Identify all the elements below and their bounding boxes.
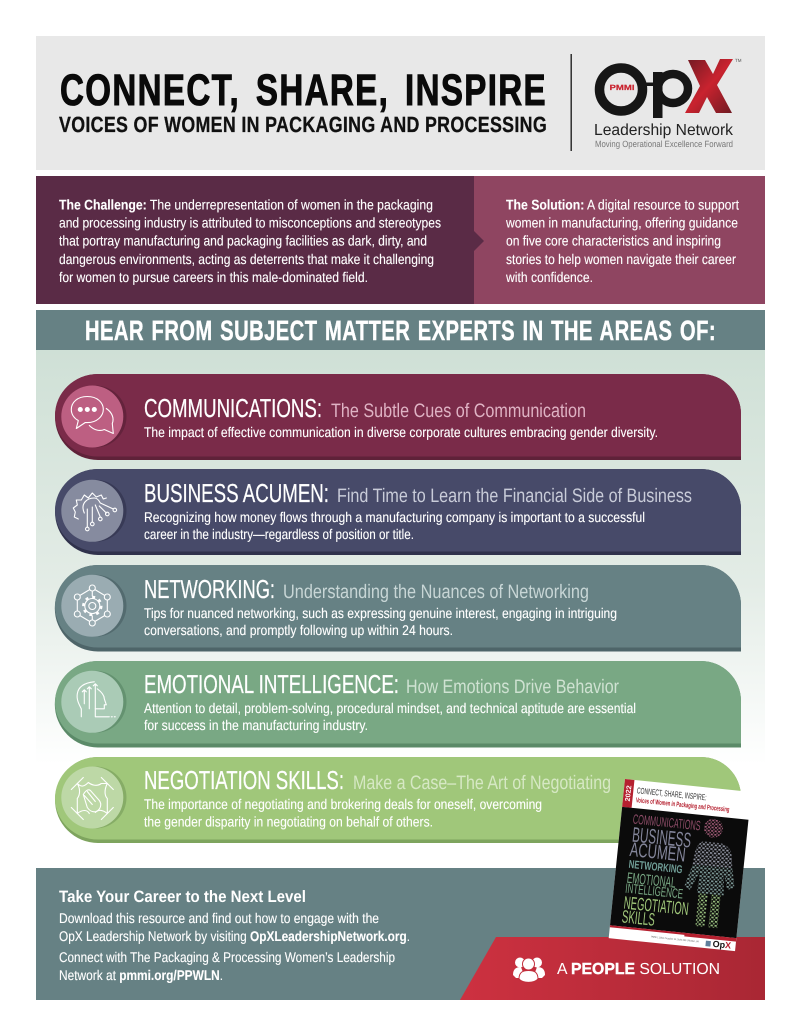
icon: network gear	[74, 585, 110, 626]
cover word list	[621, 811, 701, 933]
cover word list: COMMUNICATIONS	[632, 812, 701, 833]
banner: a people solution	[460, 937, 765, 1000]
panel: the solution	[474, 176, 765, 304]
cover word list: EMOTIONAL	[626, 870, 677, 892]
heading: NETWORKING:	[144, 574, 275, 604]
description: career in the industry—regardless of position or title.	[144, 526, 414, 542]
description: Recognizing how money flows through a manufacturing company is important to a successful	[144, 509, 645, 525]
heading: COMMUNICATIONS:	[144, 393, 322, 423]
OpX Leadership Network logo: Moving Operational Excellence Forward	[595, 139, 733, 149]
description: The impact of effective communication in diverse corporate cultures embracing gender diversity.	[144, 424, 658, 440]
footer text: OpX Leadership Network by visiting OpXLeadershipNetwork.org.	[59, 928, 410, 944]
cover word list: SKILLS	[621, 906, 656, 930]
solution text	[505, 196, 739, 285]
solution text: stories to help women navigate their career	[506, 251, 736, 267]
footer panel	[36, 868, 765, 1000]
background panel	[36, 350, 765, 868]
header panel	[36, 36, 765, 170]
cover word list: ACUMEN	[629, 839, 687, 867]
challenge text: that portray manufacturing and packaging facilities as dark, dirty, and	[59, 233, 427, 249]
OpX Leadership Network logo: Leadership Network	[594, 122, 734, 139]
publication cover	[609, 779, 751, 951]
solution text: on five core characteristics and inspiring	[506, 233, 721, 249]
description: Attention to detail, problem-solving, procedural mindset, and technical aptitude are essential	[144, 700, 636, 716]
description	[144, 700, 636, 733]
description: for success in the manufacturing industry.	[144, 717, 368, 733]
footer text: Connect with The Packaging & Processing Women’s Leadership	[59, 949, 395, 965]
challenge text: The Challenge: The underrepresentation of women in the packaging	[59, 196, 433, 212]
subheading: Make a Case–The Art of Negotiating	[353, 772, 611, 794]
description: The importance of negotiating and brokering deals for oneself, overcoming	[144, 796, 542, 812]
title: CONNECT, SHARE, INSPIRE	[60, 66, 547, 115]
section heading band	[36, 310, 765, 350]
description: the gender disparity in negotiating on behalf of others.	[144, 814, 433, 830]
icon: head with arrows	[77, 682, 115, 717]
cover word list: NETWORKING	[628, 859, 683, 876]
subheading: How Emotions Drive Behavior	[406, 676, 619, 698]
cover figure made of dots	[680, 816, 741, 930]
card: emotional intelligence	[55, 661, 741, 748]
subheading: The Subtle Cues of Communication	[331, 400, 586, 422]
heading: BUSINESS ACUMEN:	[144, 478, 329, 508]
footer heading: Take Your Career to the Next Level	[59, 888, 306, 906]
challenge text: dangerous environments, acting as deterrents that make it challenging	[59, 251, 434, 267]
card: networking	[55, 565, 741, 652]
publication cover: PMMI | 11911 Freedom Dr, Suite 600 | Reston, VA	[651, 935, 699, 943]
icon: gear circuit	[73, 493, 117, 531]
heading: EMOTIONAL INTELLIGENCE:	[144, 669, 399, 699]
footer text	[59, 910, 410, 983]
description: conversations, and promptly following up within 24 hours.	[144, 622, 453, 638]
cover word list: INTELLIGENCE	[625, 881, 684, 901]
cover footer logo: OpX	[712, 939, 732, 951]
subheading: Find Time to Learn the Financial Side of Business	[337, 485, 692, 507]
description	[144, 605, 617, 638]
solution text: The Solution: A digital resource to support	[506, 196, 739, 212]
description: Tips for nuanced networking, such as expressing genuine interest, engaging in intriguing	[144, 605, 617, 621]
solution text: with confidence.	[505, 269, 593, 285]
footer text: Network at pmmi.org/PPWLN.	[59, 967, 223, 983]
challenge text	[59, 196, 441, 285]
description	[144, 796, 542, 830]
cover word list: BUSINESS	[631, 824, 692, 852]
publication cover: Voices of Women in Packaging and Processing	[635, 796, 730, 814]
OpX Leadership Network logo: TM	[735, 58, 742, 63]
icon: joined hands	[71, 778, 113, 820]
panel: the challenge	[36, 176, 474, 304]
card: communications	[55, 374, 741, 460]
footer text: Download this resource and find out how to engage with the	[59, 910, 379, 926]
subheading: Understanding the Nuances of Networking	[283, 581, 589, 603]
solution text: women in manufacturing, offering guidance	[505, 214, 738, 230]
challenge text: and processing industry is attributed to misconceptions and stereotypes	[59, 214, 441, 230]
card: negotiation skills	[55, 757, 741, 843]
banner text: A PEOPLE SOLUTION	[557, 961, 720, 978]
cover title: CONNECT, SHARE, INSPIRE:	[636, 785, 707, 802]
description	[144, 509, 645, 542]
icon: people	[513, 958, 545, 982]
subtitle: VOICES OF WOMEN IN PACKAGING AND PROCESSING	[59, 112, 547, 137]
OpX Leadership Network logo	[594, 58, 742, 149]
publication cover: 2022	[625, 785, 633, 802]
icon: speech bubbles	[71, 396, 113, 434]
heading: NEGOTIATION SKILLS:	[144, 765, 344, 795]
card: business acumen	[55, 469, 741, 555]
cover word list: NEGOTIATION	[623, 893, 690, 919]
challenge text: for women to pursue careers in this male-dominated field.	[59, 269, 368, 285]
OpX Leadership Network logo: PMMI	[610, 83, 634, 92]
